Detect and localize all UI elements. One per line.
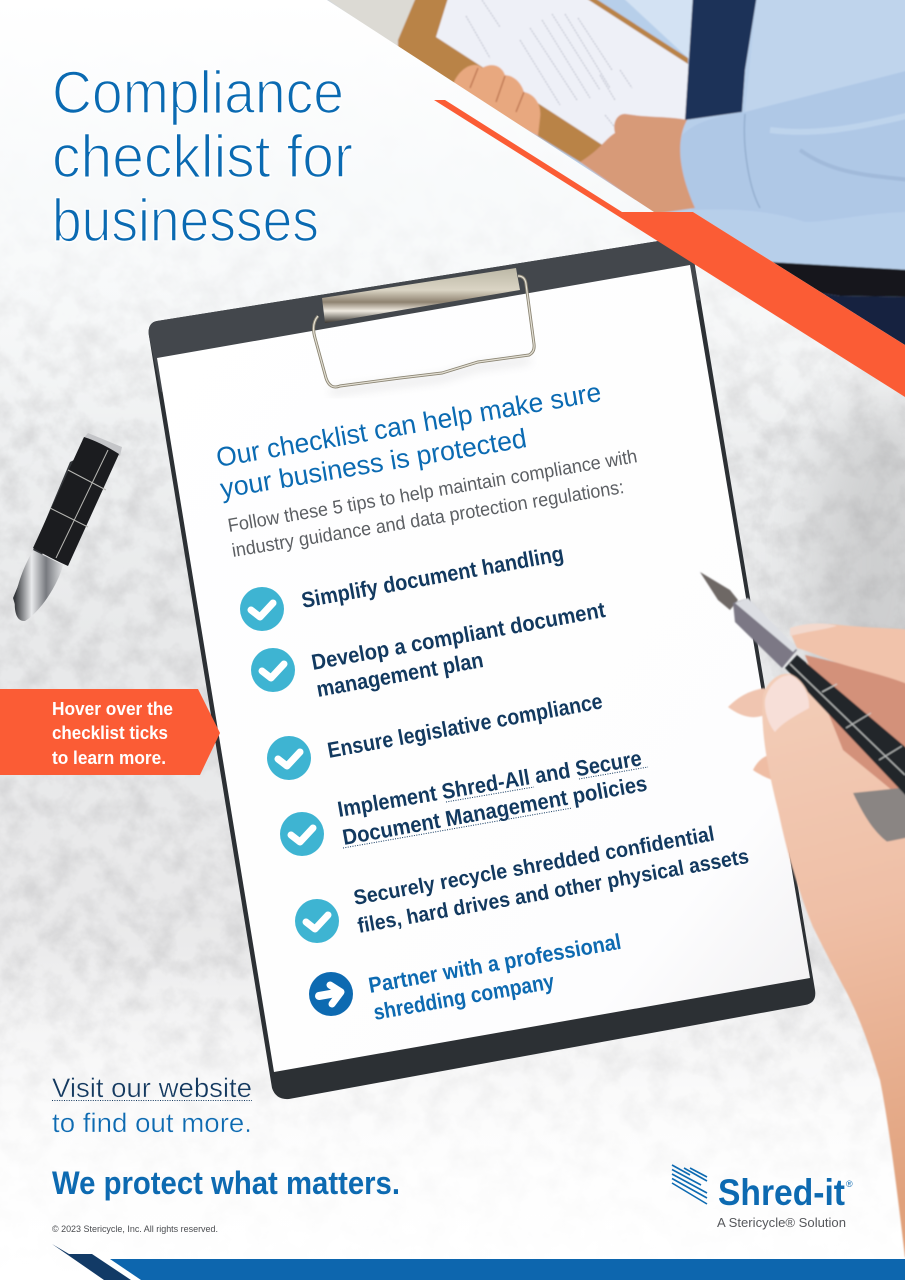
checklist item: partner call to action xyxy=(309,929,623,1025)
call to action: website xyxy=(52,1073,252,1138)
brown clipboard xyxy=(398,0,688,165)
checklist item: simplify: Simplify document handling xyxy=(299,541,566,613)
callout: hover instruction: to learn more. xyxy=(52,748,166,768)
desk pen xyxy=(13,433,122,621)
call to action: website: to find out more. xyxy=(52,1108,252,1138)
callout: hover instruction: Hover over the xyxy=(52,699,173,719)
logo: Shred-it: ® xyxy=(846,1179,853,1189)
callout: hover instruction: checklist ticks xyxy=(52,723,168,743)
document page xyxy=(436,0,688,148)
checklist intro text: industry guidance and data protection regulations: xyxy=(230,477,626,562)
callout: hover instruction xyxy=(0,689,220,775)
shirt highlight xyxy=(625,0,694,58)
title xyxy=(52,59,353,254)
checklist intro text: Follow these 5 tips to help maintain compliance with xyxy=(226,446,639,537)
checklist item: partner call to action: Partner with a professional xyxy=(367,929,623,998)
checklist item: recycle xyxy=(295,822,751,943)
title: checklist for xyxy=(52,123,353,190)
thumb with nail xyxy=(762,674,905,1000)
copyright: © 2023 Stericycle, Inc. All rights reserved. xyxy=(52,1224,218,1235)
photo: person holding clipboard xyxy=(320,0,905,350)
clipboard board xyxy=(149,236,815,1099)
tagline: We protect what matters. xyxy=(52,1165,400,1201)
logo: Shred-it: Shred-it xyxy=(718,1172,845,1213)
checklist item: document plan: management plan xyxy=(314,647,485,702)
checklist item: shred-all policies xyxy=(280,745,649,856)
wrist and palm xyxy=(762,660,905,1257)
logo: Shred-it xyxy=(672,1165,853,1230)
necktie xyxy=(685,0,757,120)
checklist item: recycle: Securely recycle shredded confidential xyxy=(352,822,716,910)
checklist item: legislative compliance xyxy=(267,688,604,780)
orange diagonal band xyxy=(434,100,905,397)
checklist item: recycle: files, hard drives and other physical assets xyxy=(356,845,751,938)
back fingers xyxy=(728,688,770,717)
left hand fingers xyxy=(454,65,540,136)
logo: Shred-it: A Stericycle® Solution xyxy=(717,1215,846,1230)
skin behind pen xyxy=(805,655,905,805)
bottom bar xyxy=(52,1244,905,1280)
document text lines xyxy=(466,0,632,140)
checklist heading: Our checklist can help make sure xyxy=(214,377,603,473)
fountain pen xyxy=(700,572,905,800)
checklist item: shred-all policies: Document Management policies xyxy=(340,771,649,850)
hand holding fountain pen xyxy=(700,572,905,1257)
belt and trousers xyxy=(770,262,905,297)
checklist item: document plan: Develop a compliant document xyxy=(309,597,608,675)
checklist item: shred-all policies: Implement Shred-All and Secure xyxy=(336,745,643,822)
paper sheet xyxy=(157,265,810,1072)
checklist item: simplify xyxy=(240,541,566,631)
title: Compliance xyxy=(52,59,344,126)
checklist item: legislative compliance: Ensure legislative compliance xyxy=(325,688,604,763)
checklist item: partner call to action: shredding company xyxy=(372,968,557,1025)
call to action: website: Visit our website xyxy=(52,1073,252,1103)
metal clip xyxy=(314,268,534,392)
clipboard xyxy=(149,236,815,1099)
shirt sleeve xyxy=(682,113,905,210)
checklist item: document plan xyxy=(251,597,608,702)
checklist heading: your business is protected xyxy=(218,423,529,504)
right hand xyxy=(580,114,695,214)
title: businesses xyxy=(52,187,319,254)
index finger xyxy=(790,624,905,685)
gap of desk under pen xyxy=(853,787,905,843)
